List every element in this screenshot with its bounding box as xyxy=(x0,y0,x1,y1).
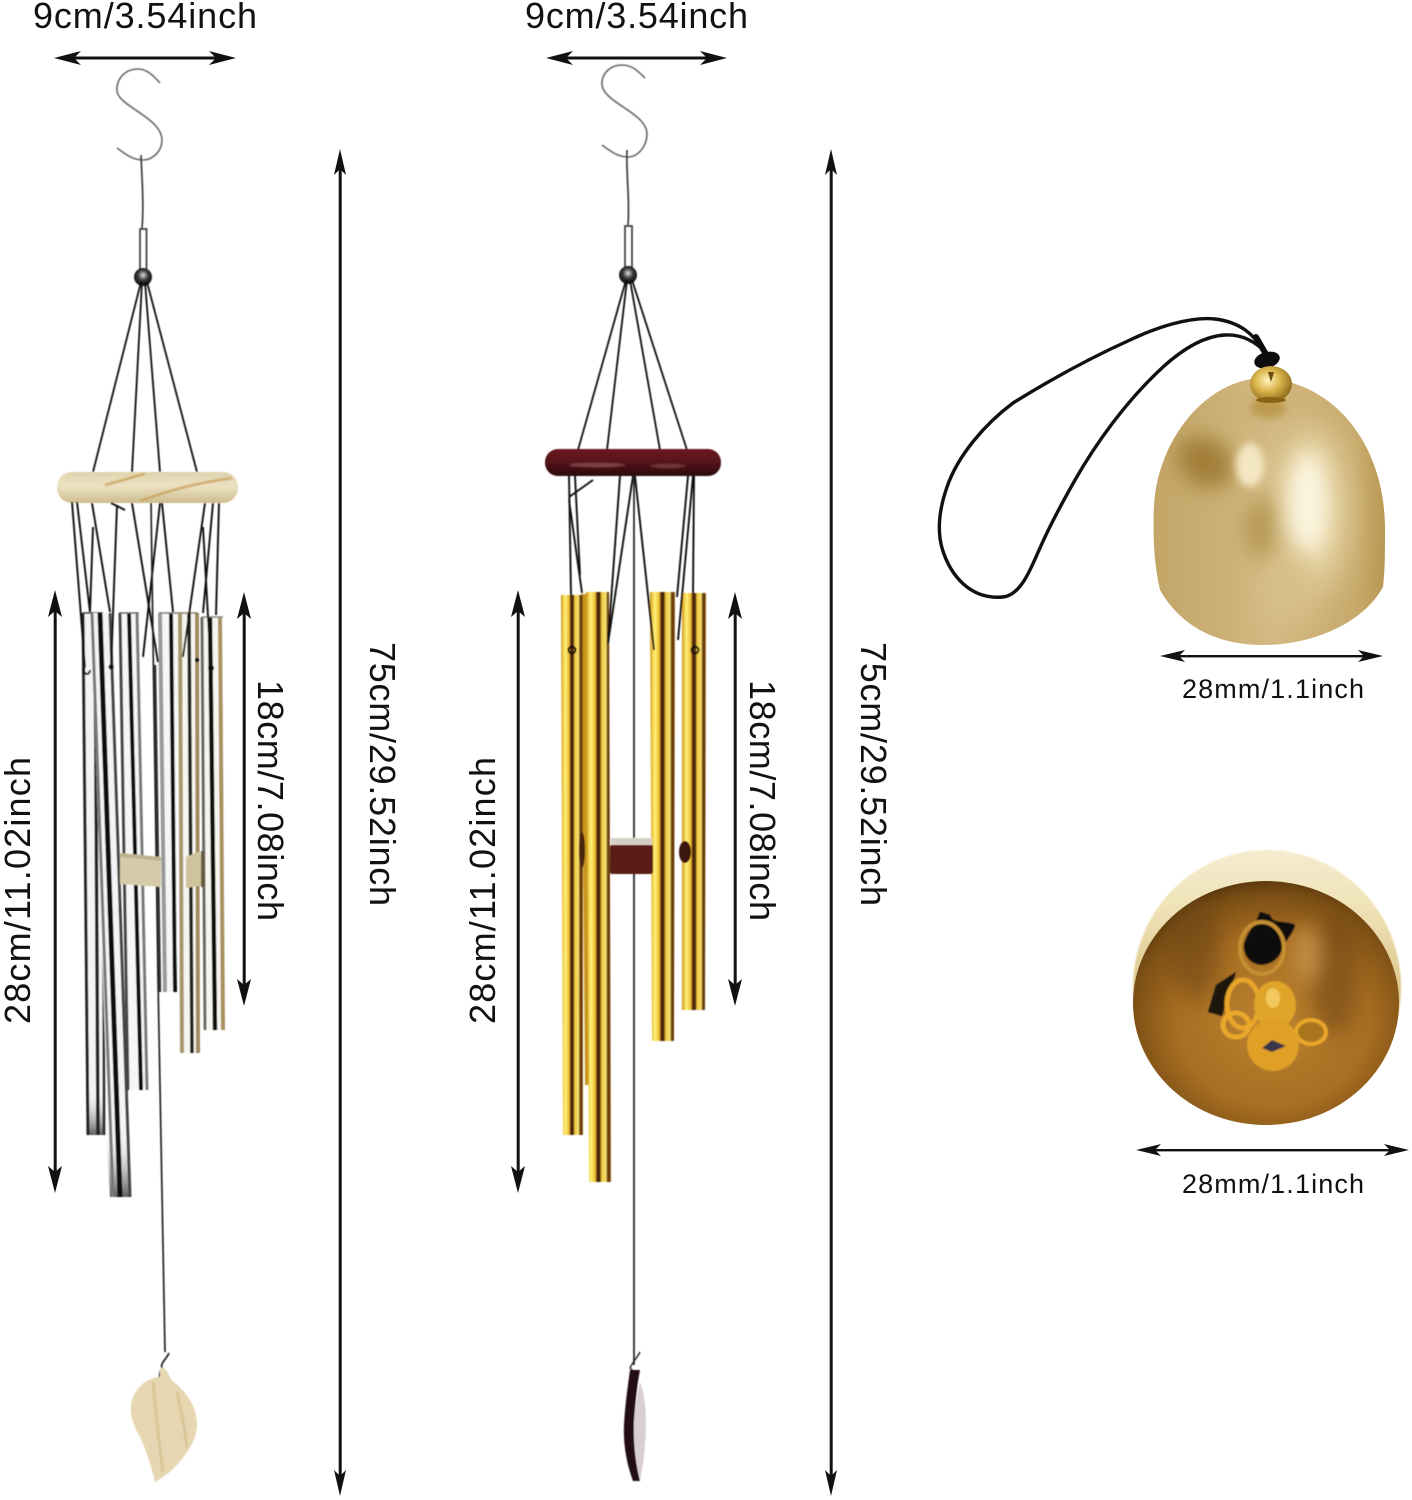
silver chime bead xyxy=(134,268,152,286)
gold chime bead xyxy=(619,266,637,284)
silver wooden ring xyxy=(57,472,238,503)
gold wooden striker xyxy=(579,832,691,874)
gold centre wire xyxy=(633,476,635,1365)
28cm arrow: right chime xyxy=(511,590,525,1193)
tube 1 xyxy=(83,613,105,1135)
bell interior xyxy=(1130,880,1405,1125)
black bead xyxy=(1252,337,1282,371)
silver wind chime xyxy=(57,69,238,1482)
tube 3 xyxy=(119,613,149,1090)
label: right chime 75cm: 75cm/29.52inch xyxy=(853,642,894,906)
label: right chime 18cm: 18cm/7.08inch xyxy=(742,680,783,921)
label: left chime 75cm: 75cm/29.52inch xyxy=(362,642,403,906)
silver centre wire xyxy=(151,503,165,1352)
tube 2 xyxy=(91,613,131,1197)
75cm arrow: left chime xyxy=(334,149,346,1496)
gold S hook xyxy=(602,65,647,267)
brass bell body xyxy=(1150,375,1390,650)
silver upper wires xyxy=(93,282,197,472)
18cm arrow: left chime xyxy=(237,592,251,1006)
gold upper wires xyxy=(578,280,687,450)
width arrow: top bell xyxy=(1160,650,1383,662)
dark wooden leaf pendant xyxy=(624,1352,646,1481)
label: top bell width: 28mm/1.1inch xyxy=(1182,674,1364,704)
silver wooden striker xyxy=(120,851,205,888)
label: bell underside width: 28mm/1.1inch xyxy=(1182,1169,1364,1199)
tube 4 xyxy=(155,613,177,992)
gold lower wires xyxy=(568,476,698,654)
wooden leaf pendant xyxy=(131,1353,197,1482)
gold tubes xyxy=(561,592,706,1182)
top bell with cord xyxy=(939,319,1390,650)
gold wind chime xyxy=(545,65,721,1481)
28cm arrow: left chime xyxy=(48,590,62,1193)
knot and jump rings xyxy=(1208,912,1326,1071)
75cm arrow: right chime xyxy=(825,149,837,1496)
width arrow: bell underside xyxy=(1136,1144,1409,1156)
bell underside view xyxy=(1130,850,1405,1125)
silver tubes xyxy=(83,613,225,1197)
silver S hook xyxy=(117,69,162,270)
width arrow: left chime xyxy=(54,51,236,65)
black cord xyxy=(939,319,1267,597)
silver lower wires xyxy=(72,502,219,674)
label: left chime 18cm: 18cm/7.08inch xyxy=(250,680,291,921)
label: right chime 28cm: 28cm/11.02inch xyxy=(462,757,503,1024)
gold wooden ring xyxy=(545,449,721,476)
18cm arrow: right chime xyxy=(728,592,742,1006)
width arrow: right chime xyxy=(546,51,727,65)
tube 5 xyxy=(177,613,200,1053)
dimension labels xyxy=(0,0,1364,1199)
small jingle bell xyxy=(1250,366,1292,403)
tube 6 xyxy=(202,617,225,1030)
bell outer rim xyxy=(1133,850,1401,1124)
